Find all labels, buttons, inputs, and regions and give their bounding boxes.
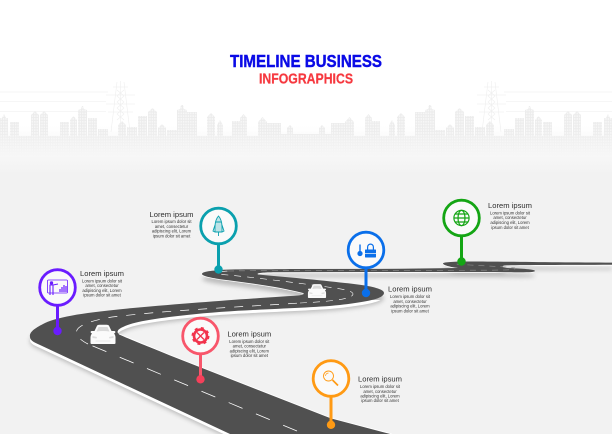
pin 5: gear and tools (red) (183, 318, 218, 383)
text: step 1 (80, 269, 124, 298)
text: step 2: amet, consectetur (155, 224, 189, 229)
icon: rocket (213, 216, 224, 236)
car: far (308, 284, 326, 298)
text: step 5: ipsum dolor sit amet (231, 353, 269, 358)
icon: key and padlock (357, 244, 376, 258)
city skyline with power pylons (0, 81, 612, 157)
icon: magnifier (324, 371, 338, 386)
text: step 2 (150, 210, 193, 238)
text: step 5 (227, 329, 271, 358)
text: step 5: adipiscing elit, Lorem (230, 348, 269, 353)
text: step 3: amet, consectetur (393, 299, 427, 304)
text: step 2: Lorem ipsum (150, 210, 193, 219)
text: step 2: ipsum dolor sit amet (153, 233, 191, 238)
text: step 1: Lorem ipsum dolor sit (82, 278, 123, 284)
text: step 3: Lorem ipsum dolor sit (390, 294, 431, 299)
text: step 4: Lorem ipsum (488, 201, 532, 210)
text: step 3: Lorem ipsum (388, 285, 432, 294)
text: step 5: amet, consectetur (233, 344, 267, 348)
winding road (30, 262, 612, 434)
pin 2: rocket (teal) (201, 208, 236, 274)
text: step 4: Lorem ipsum dolor sit (490, 210, 531, 216)
text: step 6: adipiscing elit, Lorem (360, 394, 400, 398)
pin 1: presentation (purple) (40, 270, 75, 335)
text: step 5: Lorem ipsum (227, 329, 271, 338)
title: INFOGRAPHICS (259, 72, 353, 88)
pin 6: magnifier (orange) (313, 361, 349, 429)
text: step 2: adipiscing elit, Lorem (152, 229, 192, 234)
text: step 3: adipiscing elit, Lorem (390, 304, 430, 309)
text: step 6: Lorem ipsum (358, 375, 402, 384)
icon: presenter with chart (48, 280, 68, 295)
text: step 6 (358, 375, 402, 403)
text: step 4: adipiscing elit, Lorem (490, 220, 530, 225)
text: step 1: adipiscing elit, Lorem (82, 288, 122, 293)
title (230, 51, 382, 88)
title: TIMELINE BUSINESS (230, 51, 382, 71)
text: step 3 (388, 285, 432, 313)
text: step 4 (488, 201, 532, 230)
text: step 6: amet, consectetur (363, 389, 397, 394)
icon: gear (192, 328, 208, 344)
car: near (90, 325, 116, 344)
text: step 1: amet, consectetur (85, 283, 119, 288)
text: step 5: Lorem ipsum dolor sit (229, 339, 270, 344)
pin 4: globe (green) (444, 200, 479, 266)
text: step 3: ipsum dolor sit amet (391, 308, 430, 313)
pin 3: key and lock (blue) (348, 232, 384, 297)
icon: globe (454, 210, 469, 226)
text: step 1: ipsum dolor sit amet (83, 293, 122, 298)
text: step 4: ipsum dolor sit amet (491, 225, 530, 230)
text: step 4: amet, consectetur (493, 215, 527, 220)
text: step 6: ipsum dolor sit amet (361, 398, 400, 403)
text: step 6: Lorem ipsum dolor sit (360, 384, 401, 389)
text: step 1: Lorem ipsum (80, 269, 124, 278)
text: step 2: Lorem ipsum dolor sit (151, 219, 192, 224)
